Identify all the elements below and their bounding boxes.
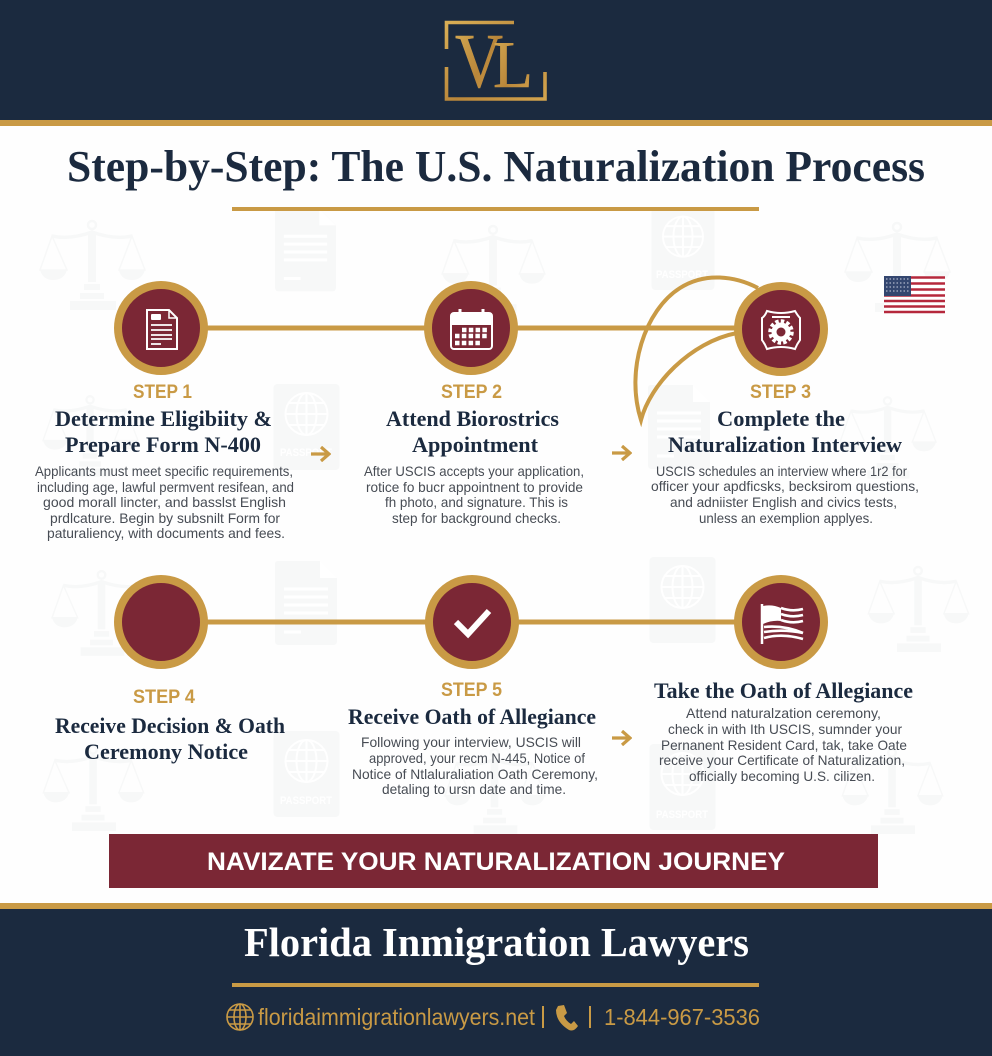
body text: officially becoming U.S. cilizen. bbox=[689, 768, 875, 784]
icon: document bbox=[118, 285, 204, 371]
step 1 bbox=[35, 285, 294, 541]
step 2 bbox=[364, 285, 584, 526]
heading: Receive Decision & Oath bbox=[55, 713, 285, 738]
heading bbox=[55, 406, 272, 457]
heading: Determine Eligibiity & bbox=[55, 406, 272, 431]
body text: approved, your recm N-445, Notice of bbox=[369, 750, 585, 766]
body text: prdlcature. Begin by subsnilt Form for bbox=[50, 510, 280, 526]
body text: including age, lawful permvent resifean, and bbox=[37, 479, 294, 495]
heading: Attend Biorostrics bbox=[386, 406, 559, 431]
website: floridaimmigrationlawyers.net bbox=[258, 1004, 536, 1030]
connector: row 1 bbox=[205, 326, 738, 330]
body text: and adniister English and civics tests, bbox=[670, 494, 897, 510]
banner: call to action bbox=[109, 834, 878, 888]
heading bbox=[668, 406, 902, 457]
arrow bbox=[612, 731, 630, 745]
body text bbox=[352, 734, 598, 797]
logo: VL monogram bbox=[446, 18, 545, 104]
watermark pattern: PASSPORT bbox=[656, 269, 708, 281]
icon: waving flag bbox=[738, 579, 824, 665]
arrow bbox=[612, 446, 630, 460]
connector: row 2 bbox=[205, 620, 738, 624]
divider bbox=[542, 1006, 544, 1028]
body text bbox=[364, 463, 584, 526]
watermark pattern: PASSPORT bbox=[656, 809, 708, 821]
body text: step for background checks. bbox=[392, 510, 561, 526]
step label: STEP 4 bbox=[133, 687, 195, 708]
footer band bbox=[0, 903, 992, 1056]
step 3 bbox=[651, 286, 919, 526]
step 5 bbox=[348, 579, 598, 797]
heading bbox=[386, 406, 559, 457]
body text bbox=[35, 463, 294, 541]
step label: STEP 5 bbox=[441, 680, 502, 701]
header band bbox=[0, 0, 992, 126]
phone number: 1-844-967-3536 bbox=[604, 1004, 760, 1030]
icon: globe bbox=[227, 1004, 253, 1030]
body text bbox=[651, 463, 919, 526]
step 6 bbox=[654, 579, 913, 784]
firm name: Florida Inmigration Lawyers bbox=[244, 919, 749, 965]
body text: officer your apdficsks, becksirom questions, bbox=[651, 478, 919, 494]
body text: receive your Certificate of Naturalization, bbox=[659, 752, 905, 768]
step label: STEP 2 bbox=[441, 382, 502, 403]
heading: Ceremony Notice bbox=[84, 739, 248, 764]
heading: Naturalization Interview bbox=[668, 432, 902, 457]
body text: rotice fo bucr appointnent to provide bbox=[366, 479, 583, 495]
step label: STEP 3 bbox=[750, 382, 811, 403]
step label: STEP 1 bbox=[133, 382, 192, 403]
body text: Following your interview, USCIS will bbox=[361, 734, 581, 750]
icon: check mark bbox=[429, 579, 515, 665]
heading: Complete the bbox=[717, 406, 845, 431]
body text: Attend naturalzation ceremony, bbox=[686, 705, 881, 721]
divider bbox=[589, 1006, 591, 1028]
step 4 bbox=[55, 579, 285, 764]
title: Step-by-Step: The U.S. Naturalization Process bbox=[67, 142, 925, 191]
body text: After USCIS accepts your application, bbox=[364, 463, 584, 479]
body text: detaling to ursn date and time. bbox=[382, 781, 566, 797]
body text: Applicants must meet specific requirements, bbox=[35, 463, 293, 479]
watermark pattern: PASSPORT bbox=[280, 795, 332, 807]
body text: Notice of Ntlaluraliation Oath Ceremony, bbox=[352, 766, 598, 782]
logo: VL monogram: V bbox=[455, 18, 503, 104]
body text: USCIS schedules an interview where 1r2 for bbox=[656, 463, 907, 479]
heading bbox=[55, 713, 285, 764]
decorative curved arrow bbox=[635, 277, 758, 420]
body text: paturaliency, with documents and fees. bbox=[47, 525, 285, 541]
heading: Receive Oath of Allegiance bbox=[348, 704, 596, 729]
body text: fh photo, and signature. This is bbox=[385, 494, 568, 510]
icon: US flag bbox=[884, 276, 945, 313]
body text: unless an exemplion applyes. bbox=[699, 510, 873, 526]
body text bbox=[659, 705, 907, 784]
icon: phone bbox=[556, 1005, 578, 1030]
watermark pattern: PASSPORT bbox=[280, 447, 332, 459]
banner: call to action: NAVIZATE YOUR NATURALIZATION JOURNEY bbox=[207, 848, 785, 876]
icon: calendar bbox=[428, 285, 514, 371]
icon: blank circle bbox=[118, 579, 204, 665]
icon: certificate with seal bbox=[738, 286, 824, 372]
footer rule bbox=[232, 983, 759, 987]
arrow bbox=[311, 447, 329, 461]
heading: Appointment bbox=[412, 432, 539, 457]
body text: Pernanent Resident Card, tak, take Oate bbox=[661, 737, 907, 753]
heading: Prepare Form N-400 bbox=[65, 432, 261, 457]
title underline bbox=[232, 207, 759, 211]
watermark pattern bbox=[40, 208, 969, 834]
body text: good morall lincter, and basslst English bbox=[43, 494, 286, 510]
logo: VL monogram: L bbox=[493, 28, 533, 102]
body text: check in with Ith USCIS, sumnder your bbox=[668, 721, 902, 737]
heading: Take the Oath of Allegiance bbox=[654, 678, 913, 703]
